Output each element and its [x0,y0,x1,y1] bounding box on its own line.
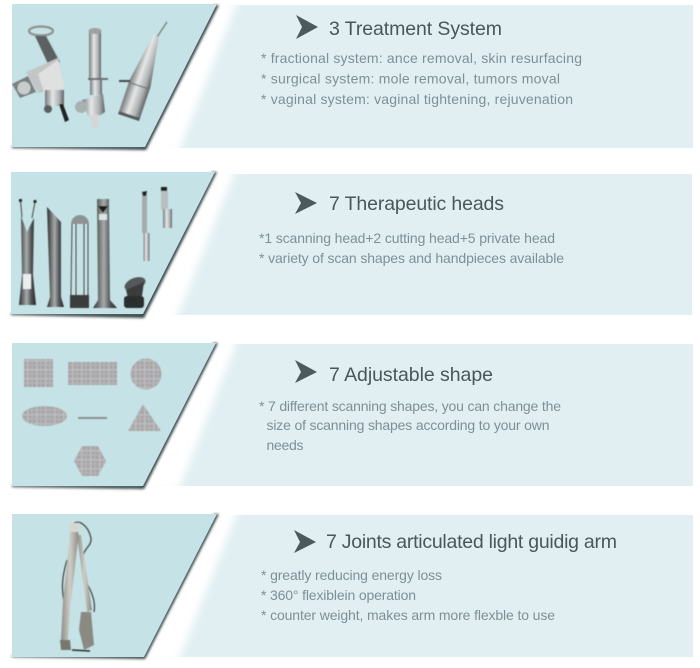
head 4 [93,199,117,308]
text panel 4 [156,515,693,657]
head 7 [161,187,172,228]
heading 4: 7 Joints articulated light guidig arm [326,531,617,553]
heading 2: 7 Therapeutic heads [329,193,504,215]
arrow 2 [295,192,317,214]
hexagon shape [74,446,106,476]
bullet 3 line 2: size of scanning shapes according to your own [266,417,550,433]
bullet 4.1: * greatly reducing energy loss [261,567,442,583]
bullet 1.1: * fractional system: ance removal, skin resurfacing [261,50,582,66]
bullet 4.3: * counter weight, makes arm more flexble to use [261,607,555,623]
image panel 2 shadow [11,172,217,318]
image panel 2 [11,172,215,314]
handpiece C [118,22,167,121]
image panel 4 [12,514,217,657]
head 6 [142,191,150,261]
head 5: wedge [123,274,147,308]
text panel 1 glow [156,5,238,148]
arrow 4 [294,530,316,553]
row 2: 7 Therapeutic heads [11,169,692,320]
text panel 3 glow [156,344,238,486]
image panel 1 [12,4,217,147]
head 1 [19,199,37,305]
arrow 1 [296,15,318,39]
text panel 2 [154,174,692,315]
icon: scan shapes [22,358,162,476]
bullet 1.2: * surgical system: mole removal, tumors moval [261,70,560,86]
handpiece B [75,28,108,130]
text panel 3 [156,344,693,486]
bullet 2.2: * variety of scan shapes and handpieces available [259,250,564,266]
text panel 1 [156,5,693,148]
bullet 1.3: * vaginal system: vaginal tightening, rejuvenation [261,91,573,107]
bullet 3 line 3: needs [266,437,304,453]
head 2 [47,207,64,307]
arm top joint [70,523,79,532]
row 3: 7 Adjustable shape [12,339,693,491]
heading 1: 3 Treatment System [329,18,502,40]
ellipse shape [22,406,67,426]
square shape [24,359,53,387]
head 3 [70,215,89,308]
arm left segment [61,526,79,640]
circle shape [130,358,162,390]
arm lower joints [60,640,71,650]
icon: therapeutic heads [19,187,172,308]
image panel 4 shadow [12,514,219,659]
bullet 2.1: *1 scanning head+2 cutting head+5 private head [259,230,555,246]
heading 3: 7 Adjustable shape [329,364,493,386]
arm base [72,650,90,651]
bullet 4.2: * 360° flexiblein operation [261,587,416,603]
text panel 4 glow [156,515,238,657]
text panel 2 glow [154,174,236,315]
arm right segment [77,535,92,612]
image panel 3 [12,343,216,486]
bullet 3 line 1: * 7 different scanning shapes, you can change the [259,398,561,414]
line shape [78,417,107,419]
arrow 3 [295,360,317,383]
image panel 1 shadow [12,5,219,150]
row 1: 3 Treatment System [12,0,693,153]
arm cables [62,522,95,612]
handpiece A [12,26,69,122]
icon: articulated arm [60,522,95,651]
image panel 3 shadow [12,343,218,489]
icon: treatment handpieces [12,22,167,130]
rectangle shape [68,362,117,385]
row 4: 7 Joints articulated light guidig arm [12,510,693,662]
triangle shape [128,404,161,431]
